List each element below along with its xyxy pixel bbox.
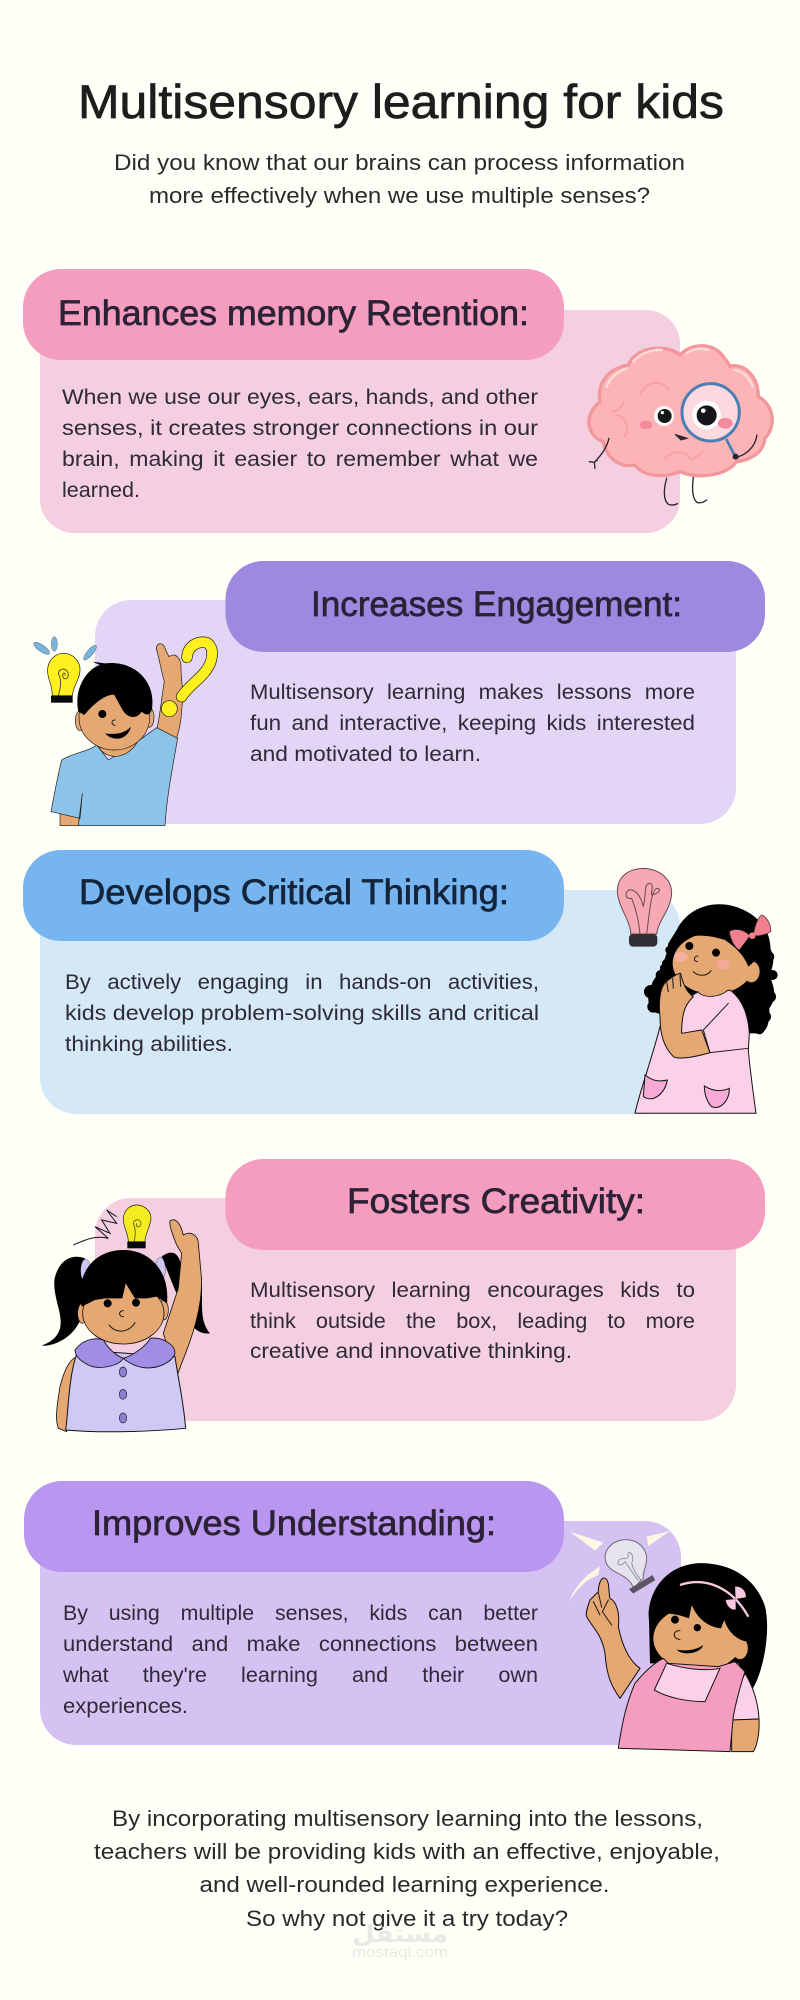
body text: fosters creativity: think outside the box, leading to more [250,1309,695,1333]
icon: girl with pigtails and yellow bulb [42,1205,210,1432]
panel: increases engagement [32,561,765,826]
heading: fosters creativity: Fosters Creativity: [347,1182,645,1221]
watermark: mostaql.com [352,1944,448,1961]
title: Multisensory learning for kids [78,75,724,128]
body text: increases engagement: and motivated to learn. [250,742,481,766]
body text: develops critical thinking: kids develop problem-solving skills and critical [65,1001,539,1025]
panel: fosters creativity [42,1159,765,1432]
body text: increases engagement [250,680,695,766]
icon: girl pointing at glowing bulb [569,1531,767,1752]
icon: boy pointing with bulb and question mark [32,637,212,826]
body text: enhances memory retention: learned. [62,478,140,502]
body text: develops critical thinking: By actively engaging in hands-on activities, [65,970,539,994]
heading pill: increases engagement [226,561,765,652]
panel: develops critical thinking [23,850,778,1114]
intro text: Did you know that our brains can process information [114,150,685,175]
icon: girl thinking with pink bulb [617,868,778,1113]
body text: fosters creativity: Multisensory learning encourages kids to [250,1278,695,1302]
heading pill: improves understanding [24,1481,564,1572]
body text: enhances memory retention: senses, it creates stronger connections in our [62,416,538,440]
body text: improves understanding: what they're learning and their own [62,1663,538,1687]
body text: improves understanding: experiences. [63,1694,188,1718]
closing text [94,1806,720,1931]
panel: enhances memory retention [23,269,772,533]
heading pill: fosters creativity [226,1159,765,1250]
closing text: So why not give it a try today? [246,1906,568,1931]
body text: enhances memory retention: brain, making it easier to remember what we [62,447,538,471]
body text: enhances memory retention [62,385,538,502]
heading pill: enhances memory retention [23,269,564,360]
heading: increases engagement: Increases Engagement: [311,585,682,624]
body text: improves understanding: By using multiple senses, kids can better [63,1601,538,1625]
watermark [352,1920,448,1961]
intro text [114,150,685,208]
body text: fosters creativity [250,1278,695,1363]
heading: improves understanding: Improves Understanding: [92,1504,496,1543]
body text: develops critical thinking: thinking abilities. [65,1032,233,1056]
heading: develops critical thinking: Develops Critical Thinking: [79,873,509,912]
panel: improves understanding [24,1481,767,1752]
body text: increases engagement: Multisensory learning makes lessons more [250,680,695,704]
heading: enhances memory retention: Enhances memory Retention: [58,294,529,333]
body text: improves understanding [62,1601,538,1718]
icon: brain with magnifying glass [589,346,772,505]
intro text: more effectively when we use multiple senses? [149,183,650,208]
body text: develops critical thinking [65,970,539,1056]
body text: improves understanding: understand and make connections between [63,1632,538,1656]
watermark: مستقل [352,1920,448,1948]
body text: enhances memory retention: When we use our eyes, ears, hands, and other [62,385,538,409]
body text: increases engagement: fun and interactive, keeping kids interested [250,711,695,735]
closing text: teachers will be providing kids with an effective, enjoyable, [94,1839,720,1864]
closing text: and well-rounded learning experience. [200,1872,610,1897]
body text: fosters creativity: creative and innovative thinking. [250,1339,572,1363]
closing text: By incorporating multisensory learning into the lessons, [112,1806,703,1831]
heading pill: develops critical thinking [23,850,564,941]
